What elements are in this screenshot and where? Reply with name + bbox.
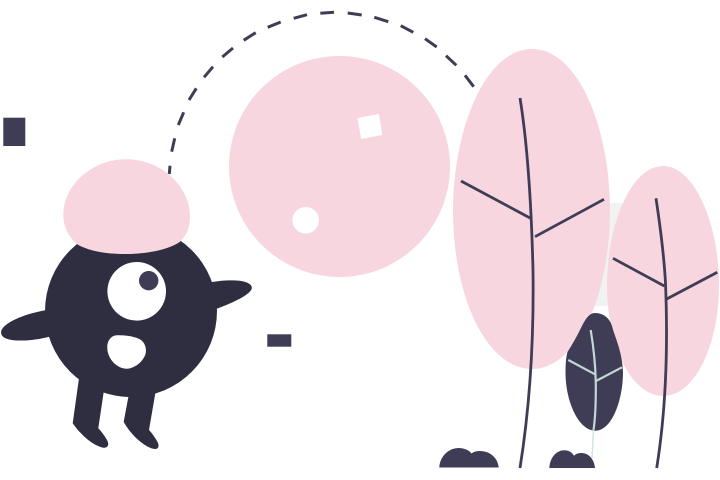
right leg [124,391,159,449]
eye [107,262,166,321]
left arm [1,310,52,341]
stem and branches [613,198,717,468]
white square [357,114,382,139]
small dark leaf [566,313,623,458]
body [45,225,217,397]
small rectangle left [3,118,25,146]
character [1,159,252,449]
mouth [107,335,146,369]
small rectangle centre [267,334,291,347]
pale stem [568,330,622,458]
grey background rectangle [585,203,630,306]
large pink circle [229,56,450,277]
left bush [439,448,499,468]
stem and branches [461,98,604,468]
left leg [73,376,108,448]
right arm [209,280,252,309]
right pink leaf [607,166,719,468]
dashed arc [169,12,474,174]
hat [63,159,190,254]
white dot [292,207,319,234]
pupil [139,271,158,290]
right bush [549,450,595,468]
tall pink leaf [453,49,610,468]
